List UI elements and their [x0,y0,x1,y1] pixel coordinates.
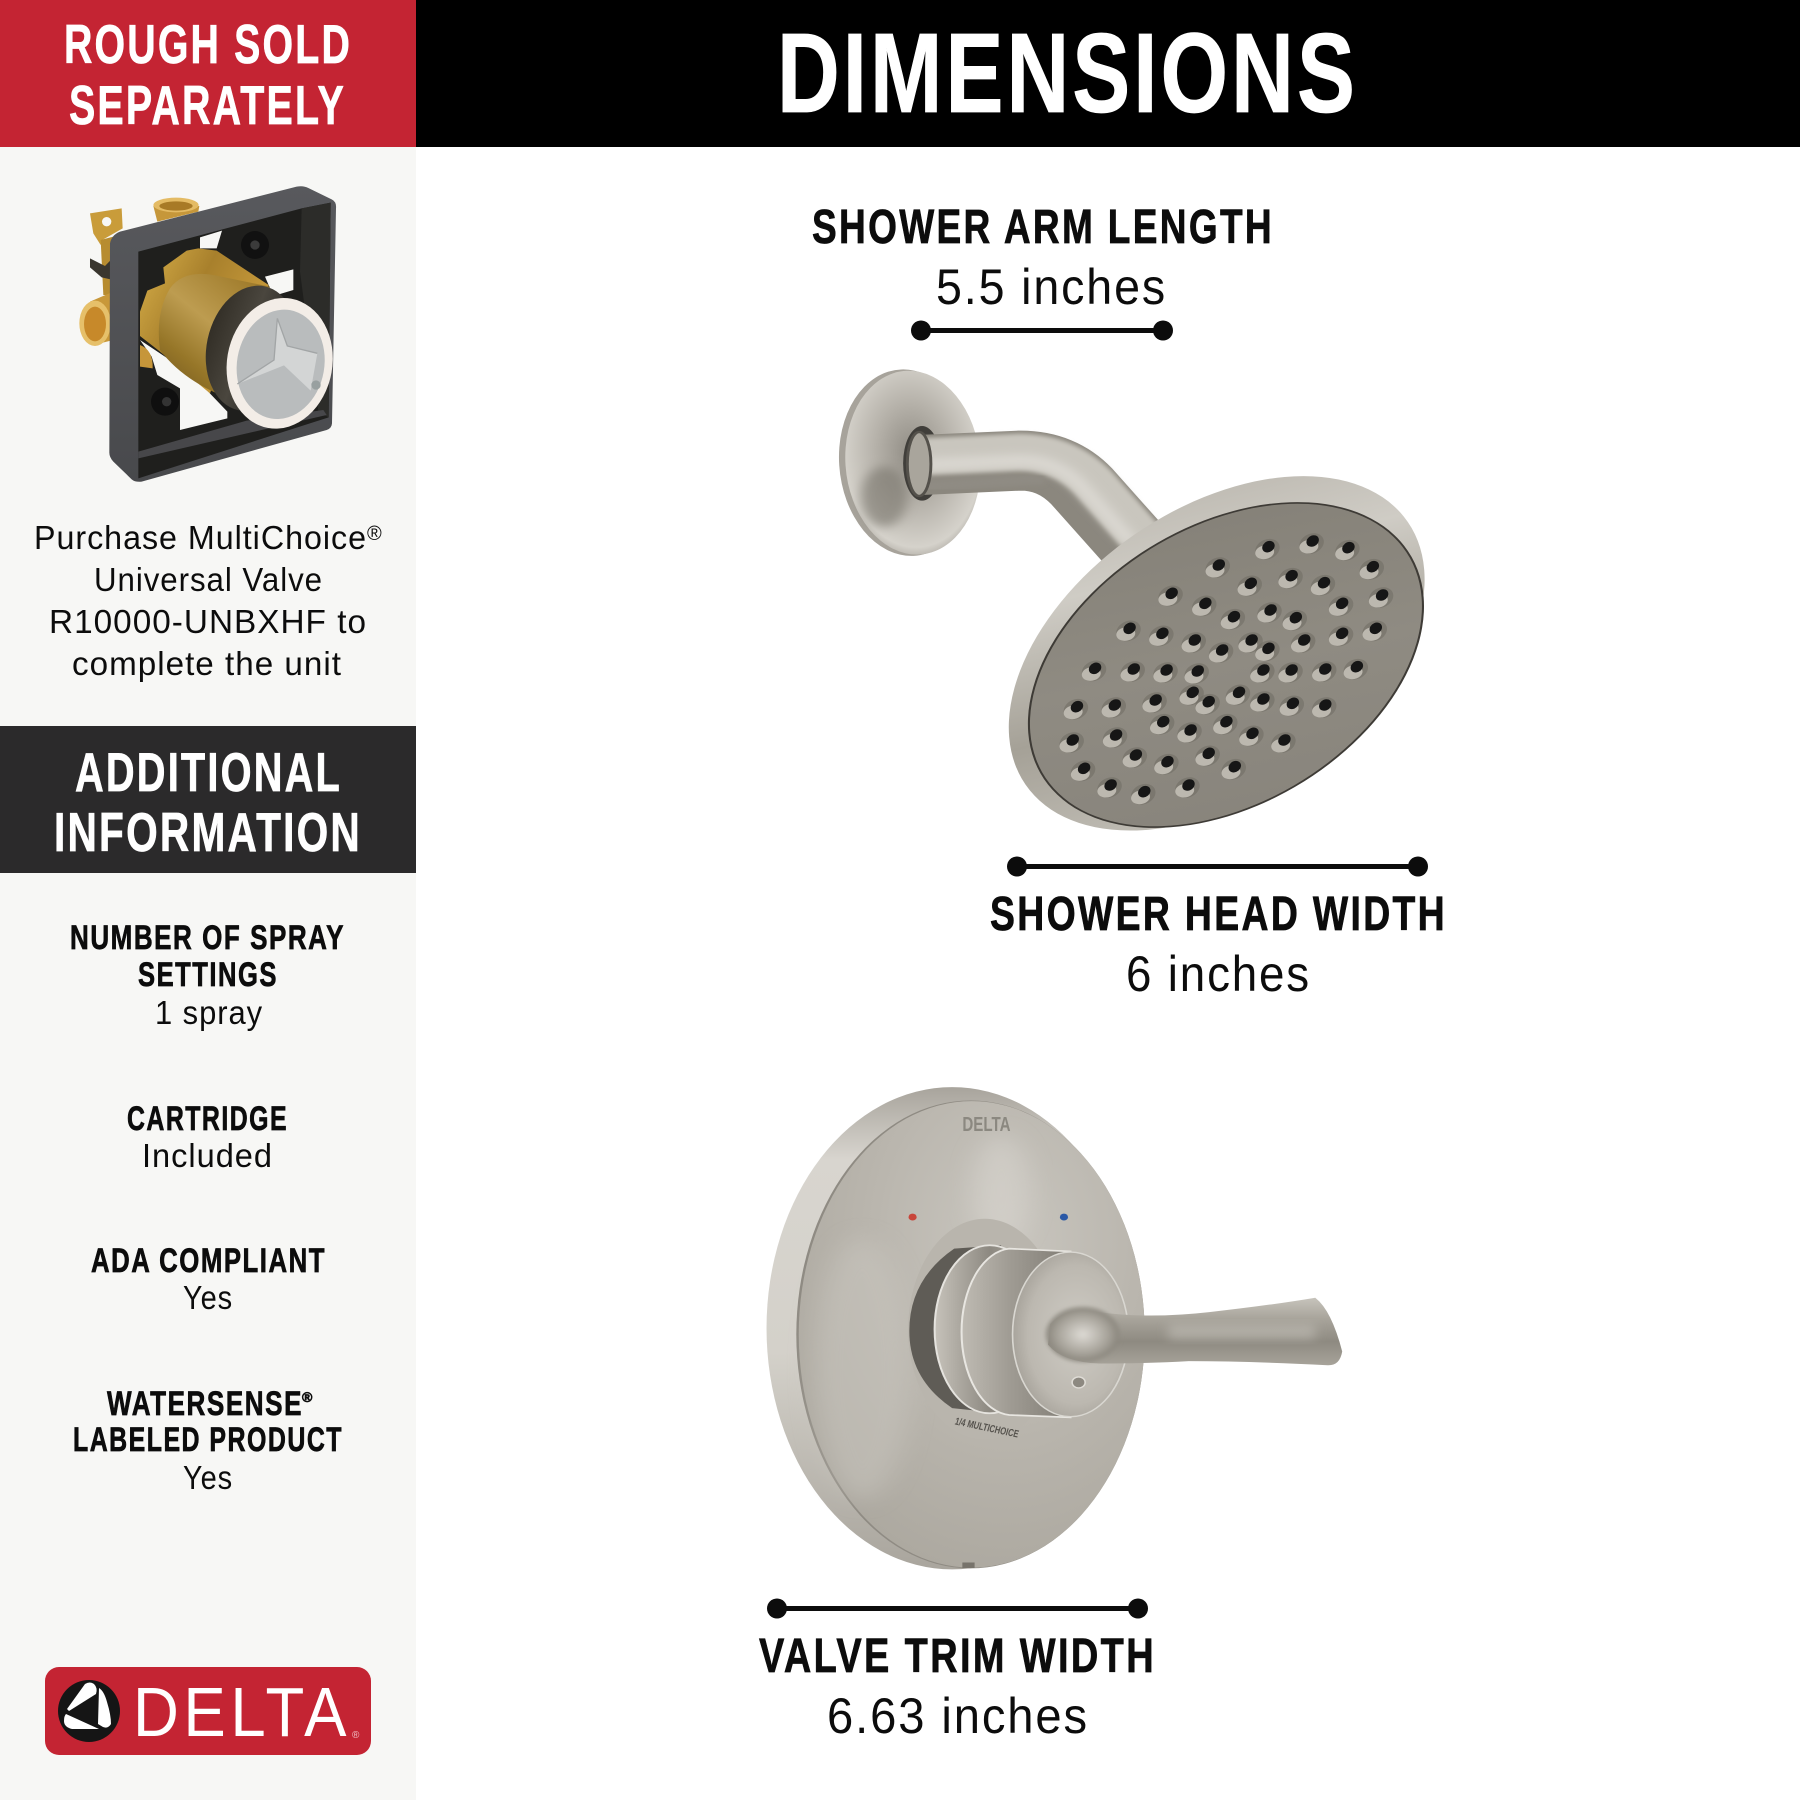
label: shower arm length: SHOWER ARM LENGTH [812,201,1274,254]
text block: number of spray settings: 1 spray [155,994,263,1031]
spray nozzles [1054,529,1398,808]
text block: ada compliant [91,1242,326,1316]
panel: rough sold separately banner: ROUGH SOLD [64,13,352,75]
text block: purchase valve note: complete the unit [72,645,342,682]
head [925,413,1508,893]
image: rough-in valve [79,186,343,482]
dimension line: valve trim [767,1598,1148,1618]
label: shower head width: SHOWER HEAD WIDTH [990,888,1447,941]
text block: cartridge: Included [142,1137,273,1174]
panel: dimensions title bar: DIMENSIONS [777,10,1358,136]
label: shower head width: 6 inches [1126,946,1311,1002]
panel: dimensions title bar [416,0,1800,147]
text block: ada compliant: Yes [183,1279,233,1316]
flange [833,367,986,559]
text block: number of spray settings [70,919,345,1031]
panel: rough sold separately banner [0,0,416,147]
valve collar: 1/4 MULTICHOICE [953,1416,1020,1440]
label: shower arm length [812,201,1274,315]
text block: purchase valve note: R10000-UNBXHF to [49,603,367,640]
panel: additional information heading [0,726,416,873]
text block: number of spray settings: SETTINGS [138,956,278,994]
trim plate: DELTA [962,1113,1011,1136]
image: shower head and arm [833,367,1508,893]
label: shower head width [990,888,1447,1002]
panel: rough sold separately banner: SEPARATELY [69,74,346,136]
dimension line: shower head [1007,856,1428,876]
label: valve trim width: VALVE TRIM WIDTH [759,1630,1156,1683]
text block: cartridge [127,1100,288,1174]
arm [907,432,1141,543]
text block: watersense: WATERSENSE [107,1385,303,1423]
trim plate [767,1087,1145,1569]
dimension line: shower arm [911,320,1173,340]
label: shower arm length: 5.5 inches [936,259,1167,315]
text block: cartridge: CARTRIDGE [127,1100,288,1138]
text block: ada compliant: ADA COMPLIANT [91,1242,326,1280]
text block: watersense: Yes [183,1459,233,1496]
logo: Delta: ® [352,1730,360,1741]
text block: watersense: LABELED PRODUCT [73,1421,343,1459]
label: valve trim width: 6.63 inches [827,1688,1089,1744]
text block: watersense [73,1385,343,1496]
text block: purchase valve note: Purchase MultiChoice [34,519,367,556]
text block: watersense: ® [302,1389,313,1405]
text block: purchase valve note: ® [367,523,382,545]
image: valve trim and handle [767,1087,1342,1569]
panel: additional information heading: ADDITIONAL [75,741,342,803]
text block: number of spray settings: NUMBER OF SPRAY [70,919,345,957]
valve collar [908,1219,1070,1440]
panel: additional information heading: INFORMATION [54,801,362,863]
panel: left sidebar background [0,147,416,1800]
label: valve trim width [759,1630,1156,1744]
logo: Delta: DELTA [133,1673,351,1751]
text block: purchase valve note: Universal Valve [94,561,323,598]
handle [1013,1252,1342,1417]
logo: Delta [45,1667,371,1755]
text block: purchase valve note [34,519,382,682]
